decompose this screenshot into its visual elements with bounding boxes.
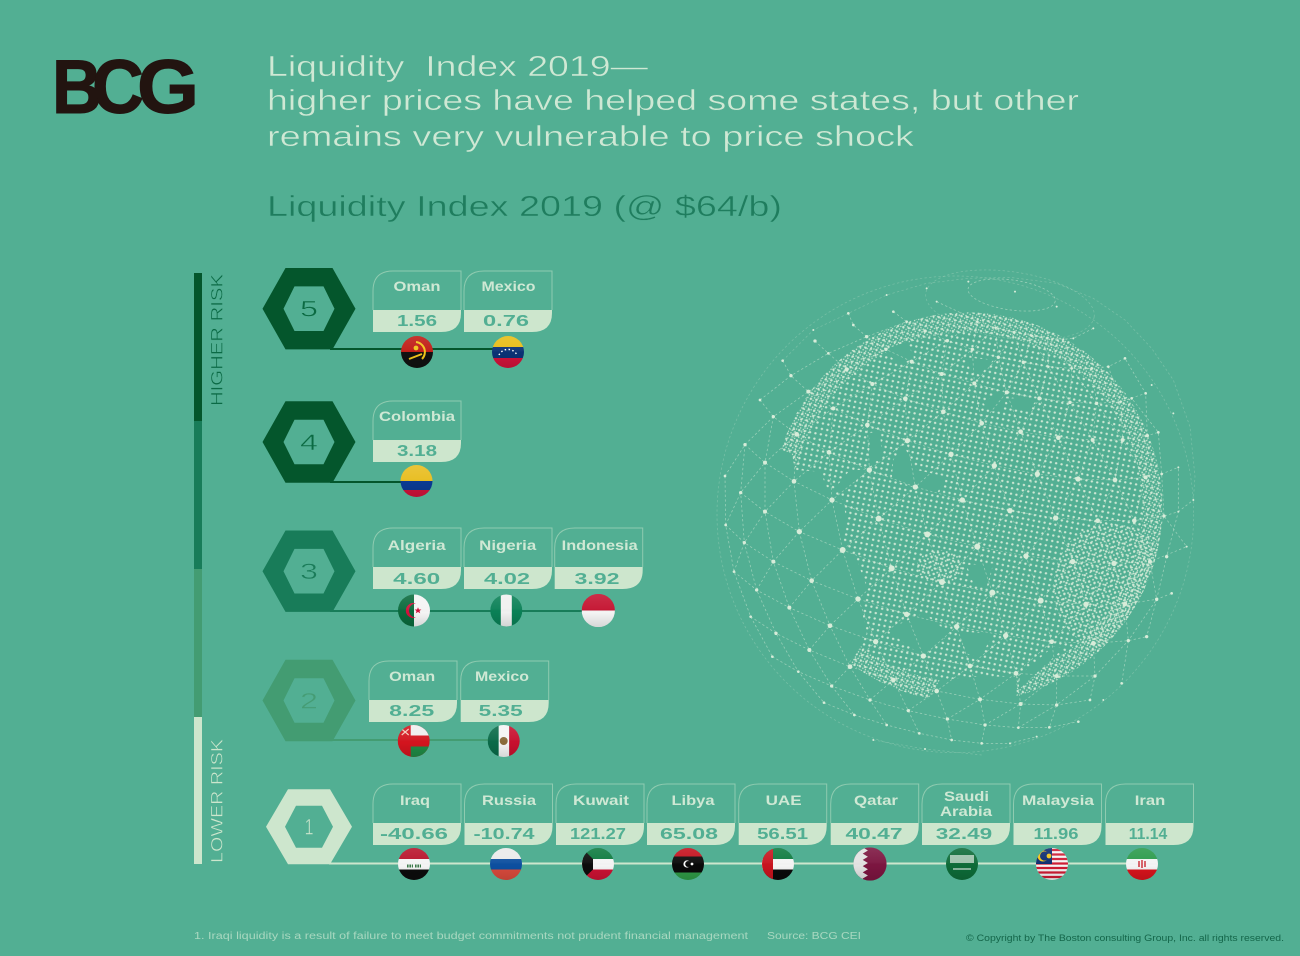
title: Liquidity Index 2019— bbox=[267, 51, 648, 83]
card: Malaysia bbox=[1014, 784, 1102, 845]
card: Saudi Arabia: 32.49 bbox=[936, 826, 993, 843]
flag: Venezuela bbox=[492, 336, 524, 368]
connector line tier 2 bbox=[330, 739, 504, 741]
tier 1 bbox=[266, 784, 1194, 881]
card: Libya: Libya bbox=[672, 793, 715, 808]
footnote: 1. Iraqi liquidity is a result of failure to meet budget commitments not prudent financial management bbox=[194, 931, 748, 942]
card: Russia bbox=[464, 784, 552, 845]
card: Saudi Arabia: Arabia bbox=[940, 804, 993, 819]
risk scale bar bbox=[194, 273, 202, 864]
card: Nigeria 4.02: Nigeria bbox=[479, 538, 537, 553]
title bbox=[267, 51, 1079, 153]
label: higher risk: HIGHER RISK bbox=[208, 273, 226, 406]
card: Oman 1.56: Oman bbox=[394, 279, 440, 294]
hexagon 4: 4 bbox=[300, 430, 318, 455]
card: Nigeria 4.02 bbox=[464, 528, 552, 589]
flag: Qatar bbox=[853, 847, 887, 881]
flag: Russia bbox=[490, 848, 522, 880]
card: Iran bbox=[1106, 784, 1194, 845]
card: Colombia 3.18: 3.18 bbox=[397, 443, 437, 460]
card: Algeria 4.60 bbox=[373, 528, 461, 589]
globe: network nodes bbox=[724, 281, 1194, 750]
flag: Iran bbox=[1126, 848, 1158, 880]
card: UAE: UAE bbox=[766, 793, 802, 808]
card: Iraq bbox=[373, 784, 461, 845]
connector line tier 5 bbox=[330, 348, 508, 350]
flag: Algeria bbox=[398, 594, 430, 626]
card: UAE bbox=[739, 784, 827, 845]
tier 5 bbox=[262, 268, 552, 368]
connector line tier 3 bbox=[330, 610, 598, 612]
card: Oman 8.25 bbox=[369, 661, 457, 722]
flag: Mexico bbox=[488, 725, 520, 757]
logo: BCG bbox=[52, 45, 199, 130]
flag: Malaysia bbox=[1036, 848, 1068, 880]
hexagon 5: 5 bbox=[300, 297, 318, 322]
card: Algeria 4.60: Algeria bbox=[388, 538, 446, 553]
card: Libya: 65.08 bbox=[660, 826, 719, 843]
globe: dotted continents bbox=[782, 312, 1162, 698]
flag: Colombia bbox=[400, 465, 432, 497]
globe bbox=[717, 260, 1195, 755]
flag: Saudi Arabia bbox=[946, 848, 978, 880]
card: Colombia 3.18 bbox=[373, 401, 461, 462]
card: Saudi Arabia bbox=[922, 784, 1010, 845]
card: Oman 1.56 bbox=[373, 271, 461, 332]
tier 4 bbox=[262, 401, 461, 497]
card: Russia: -10.74 bbox=[474, 826, 535, 843]
flag: Iraq bbox=[398, 848, 430, 880]
hexagon 2: 2 bbox=[300, 688, 318, 714]
card: Oman 8.25: Oman bbox=[389, 669, 435, 684]
card: Nigeria 4.02: 4.02 bbox=[484, 571, 530, 588]
logo: BCG: G bbox=[137, 45, 199, 130]
card: Algeria 4.60: 4.60 bbox=[393, 571, 440, 588]
card: Mexico 5.35 bbox=[461, 661, 549, 722]
card: Kuwait: 121.27 bbox=[570, 826, 626, 843]
card: Mexico 0.76: Mexico bbox=[482, 279, 536, 294]
hexagon 1: 1 bbox=[304, 815, 314, 840]
logo: BCG: B bbox=[52, 45, 102, 130]
hexagon 4 bbox=[262, 401, 356, 483]
hexagon 1 bbox=[266, 789, 352, 864]
flag: Kuwait bbox=[582, 848, 614, 880]
card: Indonesia 3.92: 3.92 bbox=[574, 571, 620, 588]
card: Iraq: Iraq bbox=[400, 793, 430, 808]
hexagon 3: 3 bbox=[300, 559, 318, 584]
card: Iran: Iran bbox=[1135, 793, 1165, 808]
flag: UAE bbox=[762, 848, 794, 880]
card: Mexico 5.35: Mexico bbox=[475, 669, 529, 684]
flag: Libya bbox=[672, 848, 704, 880]
title: remains very vulnerable to price shock bbox=[267, 121, 915, 153]
card: Iran: 11.14 bbox=[1129, 826, 1168, 843]
card: Qatar: Qatar bbox=[854, 793, 899, 808]
card: Kuwait: Kuwait bbox=[573, 793, 630, 808]
card: Libya bbox=[647, 784, 735, 845]
card: Kuwait bbox=[556, 784, 644, 845]
card: UAE: 56.51 bbox=[757, 826, 809, 843]
hexagon 3 bbox=[262, 530, 356, 612]
card: Iraq: -40.66 bbox=[380, 826, 449, 843]
hexagon 2 bbox=[262, 660, 356, 741]
tier 2 bbox=[262, 660, 549, 757]
card: Indonesia 3.92 bbox=[555, 528, 643, 589]
card: Mexico 5.35: 5.35 bbox=[479, 703, 523, 720]
subtitle: Liquidity Index 2019 (@ $64/b) bbox=[267, 191, 782, 223]
card: Malaysia: 11.96 bbox=[1034, 826, 1079, 843]
tier 3 bbox=[262, 528, 643, 627]
card: Indonesia 3.92: Indonesia bbox=[562, 538, 638, 553]
card: Oman 8.25: 8.25 bbox=[389, 703, 435, 720]
hexagon 5 bbox=[262, 268, 356, 349]
card: Malaysia: Malaysia bbox=[1022, 793, 1095, 808]
card: Mexico 0.76 bbox=[464, 271, 552, 332]
source: Source: BCG CEI bbox=[767, 931, 861, 942]
title: higher prices have helped some states, but other bbox=[267, 85, 1079, 117]
card: Oman 1.56: 1.56 bbox=[397, 313, 437, 330]
flag: Oman bbox=[398, 725, 430, 757]
card: Saudi Arabia: Saudi bbox=[944, 789, 989, 804]
card: Russia: Russia bbox=[482, 793, 537, 808]
logo: BCG: C bbox=[92, 45, 144, 130]
flag: Angola bbox=[401, 336, 433, 368]
label: lower risk: LOWER RISK bbox=[208, 738, 226, 863]
globe: dashed mesh bbox=[717, 260, 1195, 755]
card: Colombia 3.18: Colombia bbox=[379, 409, 456, 424]
card: Qatar: 40.47 bbox=[846, 826, 902, 843]
card: Mexico 0.76: 0.76 bbox=[483, 313, 530, 330]
copyright: © Copyright by The Boston consulting Group, Inc. all rights reserved. bbox=[966, 933, 1284, 944]
connector line tier 4 bbox=[330, 481, 417, 483]
connector line tier 1 bbox=[329, 862, 1142, 864]
flag: Nigeria bbox=[490, 594, 522, 626]
card: Qatar bbox=[831, 784, 919, 845]
flag: Indonesia bbox=[582, 594, 615, 627]
